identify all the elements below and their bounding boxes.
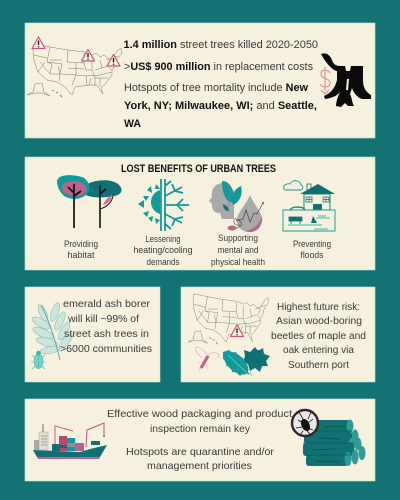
icon: sun and snowflake xyxy=(138,179,189,231)
text: emerald ash borer xyxy=(60,298,152,355)
text: inspection priorities xyxy=(107,408,292,472)
text: future risk: beetles of maple and xyxy=(271,330,366,342)
labels: benefit captions: demands xyxy=(146,257,180,267)
panel: lost benefits of urban trees xyxy=(25,157,375,270)
icon: prohibited beetle xyxy=(292,410,318,436)
text: mortality statistics: WA xyxy=(124,118,141,130)
icon: US map with southern port warning xyxy=(188,294,269,344)
labels: benefit captions: physical health xyxy=(211,257,265,267)
labels: benefit captions: Providing xyxy=(64,239,98,249)
icon: head, leaf and health chart xyxy=(209,181,264,232)
text: emerald ash borer: emerald ash borer xyxy=(63,298,151,310)
text: inspection priorities: management priorities xyxy=(147,460,252,472)
text: future risk xyxy=(271,301,366,371)
labels: benefit captions xyxy=(64,233,331,267)
labels: benefit captions: Preventing xyxy=(293,239,331,249)
text: inspection priorities: Hotspots are quarantine and/or xyxy=(126,446,275,458)
text: future risk: Highest future risk: xyxy=(277,301,360,313)
icon: trees xyxy=(57,175,121,228)
icon: long-horned beetle xyxy=(196,347,219,371)
text: mortality statistics: Hotspots of tree mortality include New xyxy=(124,82,308,94)
text: inspection priorities: inspection remain key xyxy=(150,423,251,435)
icon: oak and maple leaves xyxy=(219,347,270,379)
text: emerald ash borer: street ash trees in xyxy=(64,328,149,340)
labels: benefit captions: Lessening xyxy=(146,234,180,244)
text: mortality statistics: York, NY; Milwaukee, WI; and Seattle, xyxy=(124,100,317,112)
panel: tree mortality overview xyxy=(25,23,375,138)
icon: emerald ash borer beetle xyxy=(31,351,46,369)
labels: benefit captions: floods xyxy=(300,250,324,260)
icon: house and flood xyxy=(283,181,335,231)
icon: US map with hotspot warnings xyxy=(27,37,122,97)
panel: inspection and priorities xyxy=(25,399,375,481)
text: mortality statistics: >US$ 900 million in replacement costs xyxy=(124,61,313,73)
text: inspection priorities: Effective wood packaging and product xyxy=(107,408,292,420)
text: emerald ash borer: will kill ~99% of xyxy=(67,313,139,325)
labels: benefit captions: habitat xyxy=(68,250,95,260)
heading: LOST BENEFITS OF URBAN TREES xyxy=(121,163,276,175)
text: mortality statistics xyxy=(124,39,318,130)
text: mortality statistics: 1.4 million street trees killed 2020-2050 xyxy=(124,39,318,51)
labels: benefit captions: heating/cooling xyxy=(134,245,192,255)
text: future risk: oak entering via xyxy=(283,344,354,356)
panel: highest future risk xyxy=(181,287,375,382)
icon: cargo ship xyxy=(33,423,107,459)
icon: tree stump with dollar sign xyxy=(320,53,371,107)
panel: emerald ash borer xyxy=(25,287,160,382)
labels: benefit captions: Supporting xyxy=(218,233,258,243)
labels: benefit captions: mental and xyxy=(218,245,258,255)
icon: stacked logs xyxy=(303,420,366,466)
text: future risk: Southern port xyxy=(288,359,349,371)
text: future risk: Asian wood-boring xyxy=(276,315,362,327)
icon: ash leaf xyxy=(30,301,74,360)
text: emerald ash borer: >6000 communities xyxy=(60,343,152,355)
